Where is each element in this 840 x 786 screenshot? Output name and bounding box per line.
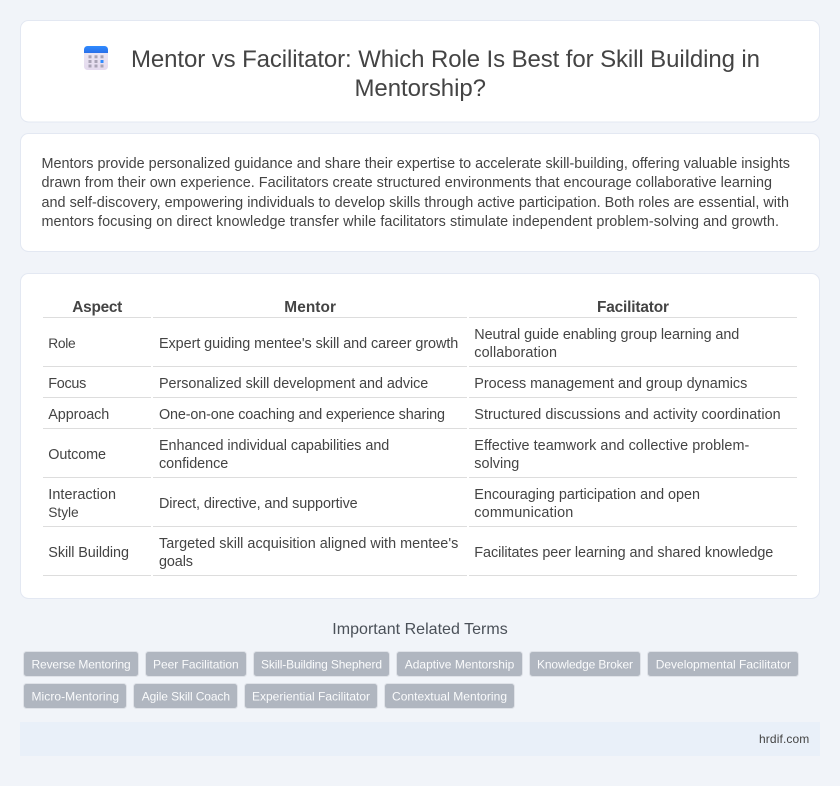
row: Role [48, 327, 739, 361]
table header row [72, 299, 669, 316]
tag: Knowledge Broker [530, 652, 640, 676]
tag: Developmental Facilitator [648, 652, 798, 676]
row: Interaction Style: Style [48, 505, 79, 520]
tag: Knowledge Broker: Knowledge Broker [537, 657, 633, 671]
heading: related terms: Important Related Terms [332, 621, 508, 638]
row: Outcome: solving [474, 456, 519, 472]
tag: Skill-Building Shepherd [254, 652, 390, 676]
row: Role: Neutral guide enabling group learning and [474, 327, 739, 343]
tag: Contextual Mentoring: Contextual Mentoring [392, 689, 507, 703]
row: Skill Building: Targeted skill acquisition aligned with mentee's [159, 536, 458, 552]
tag: Reverse Mentoring: Reverse Mentoring [32, 657, 131, 671]
table header row: Aspect [72, 299, 122, 316]
title: Mentorship? [354, 75, 486, 102]
tag: Experiential Facilitator: Experiential Facilitator [252, 689, 370, 703]
row: Outcome: Outcome [48, 447, 106, 463]
row: Interaction Style [48, 487, 700, 521]
panel: comparison table [20, 274, 820, 598]
panel: summary text: mentors focusing on direct knowledge transfer while facilitators stimulate independent problem-solving and growth. [42, 214, 779, 230]
row: Outcome [48, 438, 750, 472]
row: Focus [48, 376, 747, 392]
row: Skill Building: goals [159, 554, 193, 570]
title [131, 46, 760, 102]
row: Outcome: Effective teamwork and collective problem- [474, 438, 750, 454]
row: Outcome: confidence [159, 456, 228, 472]
table header row: Facilitator [597, 299, 669, 316]
panel: summary text: and self-discovery, empowering individuals to develop skills through active participation. Both roles are essential, with [42, 195, 789, 211]
row: Approach: Approach [48, 407, 109, 423]
icon: calendar [84, 46, 108, 70]
tag: Adaptive Mentorship: Adaptive Mentorship [405, 657, 515, 671]
row: Focus: Focus [48, 376, 86, 392]
tag list: related terms [24, 652, 798, 708]
tag: Micro-Mentoring: Micro-Mentoring [32, 689, 119, 703]
tag: Agile Skill Coach: Agile Skill Coach [142, 689, 230, 703]
footer source text: hrdif.com [759, 732, 809, 746]
tag: Peer Facilitation [146, 652, 246, 676]
title: Mentor vs Facilitator: Which Role Is Best for Skill Building in [131, 46, 760, 73]
row: Role: Role [48, 336, 76, 351]
tag: Skill-Building Shepherd: Skill-Building Shepherd [261, 657, 382, 671]
panel: summary text: drawn from their own experience. Facilitators create structured environments that encourage collaborative learning [42, 175, 772, 191]
row: Skill Building: Skill Building [48, 545, 129, 561]
row: Skill Building [48, 536, 773, 570]
tag: Peer Facilitation: Peer Facilitation [153, 657, 239, 671]
tag: Micro-Mentoring [24, 684, 126, 708]
row: Outcome: Enhanced individual capabilities and [159, 438, 389, 454]
footer bar [20, 722, 820, 756]
row: Interaction Style: Direct, directive, and supportive [159, 496, 358, 512]
row: Role: Expert guiding mentee's skill and career growth [159, 336, 458, 352]
row: Focus: Personalized skill development and advice [159, 376, 428, 392]
tag: Contextual Mentoring [384, 684, 514, 708]
panel: summary text: Mentors provide personalized guidance and share their expertise to accelerate skill-building, offering valuable insights [42, 156, 790, 172]
tag: Developmental Facilitator: Developmental Facilitator [656, 657, 791, 671]
row: Interaction Style: Interaction [48, 487, 116, 503]
row: Interaction Style: Encouraging participation and open [474, 487, 700, 503]
row: Approach: Structured discussions and activity coordination [474, 407, 781, 423]
row: Focus: Process management and group dynamics [474, 376, 747, 392]
row: Approach: One-on-one coaching and experience sharing [159, 407, 445, 423]
tag: Adaptive Mentorship [396, 652, 522, 676]
table header row: Mentor [284, 299, 336, 316]
tag: Reverse Mentoring [24, 652, 138, 676]
tag: Experiential Facilitator [244, 684, 378, 708]
row: Interaction Style: communication [474, 505, 573, 521]
row: Skill Building: Facilitates peer learning and shared knowledge [474, 545, 773, 561]
row: Role: collaboration [474, 345, 557, 361]
tag: Agile Skill Coach [134, 684, 238, 708]
panel: summary text [20, 134, 820, 252]
row: Approach [48, 407, 781, 423]
panel: title card [20, 20, 820, 122]
